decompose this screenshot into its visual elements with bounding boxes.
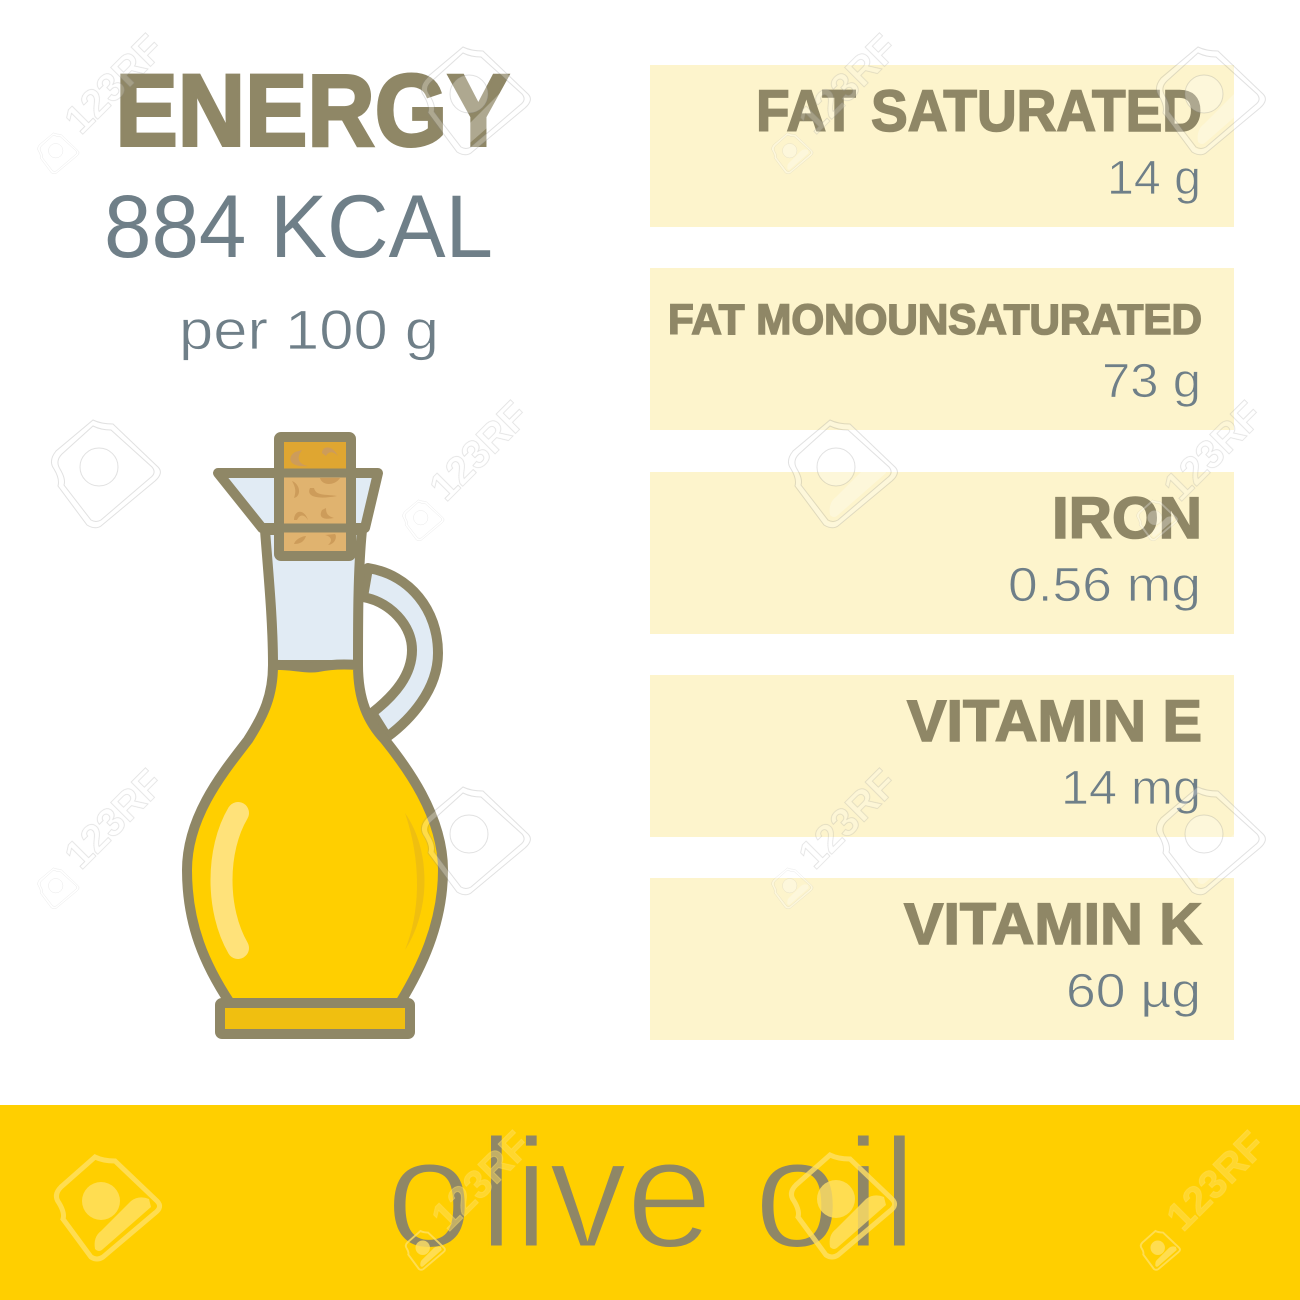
- energy value: 884 KCAL: [104, 176, 493, 276]
- infographic canvas: 123RF: [56, 26, 172, 142]
- highlight on glass: [222, 813, 238, 948]
- nutrient value: 0.56 mg: [1008, 559, 1201, 612]
- nutrient value: 73 g: [1102, 355, 1201, 408]
- icon: olive oil bottle: [187, 437, 443, 1034]
- nutrient name: FAT MONOUNSATURATED: [668, 296, 1202, 344]
- nutrient name: FAT SATURATED: [756, 79, 1202, 144]
- panel: vitamin k: [650, 878, 1234, 1040]
- infographic canvas: 123RF: [790, 761, 906, 877]
- cork stopper: [218, 437, 378, 556]
- infographic canvas: 123RF: [790, 26, 906, 142]
- nutrient value: 14 mg: [1061, 762, 1201, 815]
- panel: vitamin e: [650, 675, 1234, 837]
- infographic canvas: 123RF: [56, 761, 172, 877]
- infographic canvas: 123RF: [423, 1123, 539, 1239]
- infographic canvas: 123RF: [1158, 1123, 1274, 1239]
- oil body: [187, 664, 443, 1003]
- title: energy: ENERGY: [116, 54, 510, 168]
- nutrient name: VITAMIN K: [904, 892, 1202, 957]
- serving size note: per 100 g: [179, 298, 439, 361]
- footer band: [0, 1105, 1300, 1300]
- product name: olive oil: [386, 1107, 917, 1281]
- nutrient value: 14 g: [1107, 152, 1201, 205]
- pouring spout: [218, 473, 378, 528]
- bottle handle: [363, 568, 438, 737]
- glass neck: [265, 530, 362, 665]
- panel: fat saturated: [650, 65, 1234, 227]
- shadow on glass: [405, 813, 424, 950]
- nutrient name: VITAMIN E: [907, 689, 1202, 754]
- nutrient value: 60 µg: [1066, 965, 1201, 1018]
- infographic canvas: 123RF: [421, 393, 537, 509]
- bottle base: [220, 1003, 410, 1034]
- infographic canvas: 123RF: [1155, 393, 1271, 509]
- panel: iron: [650, 472, 1234, 634]
- panel: fat monounsaturated: [650, 268, 1234, 430]
- nutrient name: IRON: [1052, 486, 1202, 551]
